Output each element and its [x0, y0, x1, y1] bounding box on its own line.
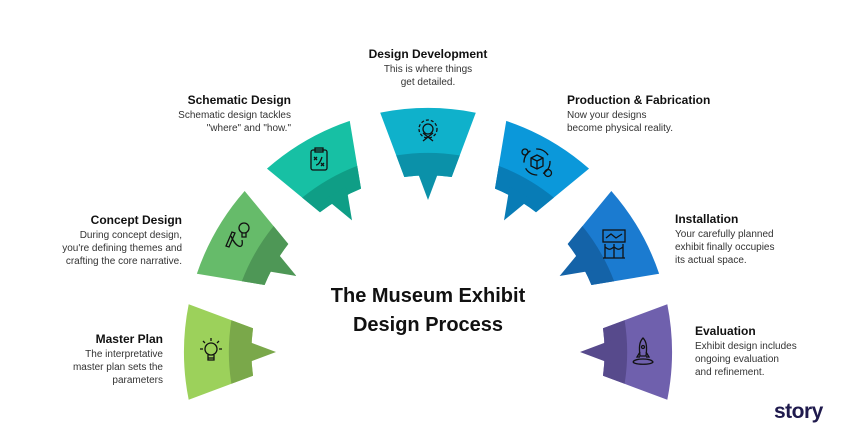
text: Concept Design: During concept design, [80, 230, 182, 241]
text: Evaluation [695, 324, 797, 378]
text: Schematic Design [178, 93, 291, 134]
segment: Concept Design [193, 189, 320, 317]
text: Schematic Design: Schematic design tackles [178, 110, 291, 121]
text: Design Development: get detailed. [401, 77, 455, 88]
text: Concept Design: Concept Design [91, 213, 182, 227]
text: Design Development: Design Development [369, 47, 487, 61]
title: Design Process [353, 314, 503, 336]
text: Production & Fabrication: Now your designs [567, 110, 646, 121]
title [330, 285, 526, 336]
icon: lightbulb [200, 338, 222, 360]
text: Installation: Installation [675, 212, 738, 226]
text: Installation: exhibit finally occupies [675, 242, 774, 253]
text: Design Development [369, 47, 488, 88]
text: Installation: its actual space. [675, 255, 747, 266]
text: Master Plan [73, 332, 163, 386]
text: Evaluation: and refinement. [695, 367, 764, 378]
segment: Design Development [380, 108, 476, 200]
text: Master Plan: The interpretative [85, 349, 163, 360]
segment: Production & Fabrication [463, 117, 591, 244]
segment: Installation [536, 189, 663, 317]
text: Master Plan: master plan sets the [73, 362, 163, 373]
text: Production & Fabrication: Production & Fabrication [567, 93, 710, 107]
text: Concept Design: you're defining themes and [62, 243, 182, 254]
icon: rocket [633, 338, 653, 364]
text: Evaluation: Exhibit design includes [695, 341, 797, 352]
text: Production & Fabrication [567, 93, 710, 134]
icon: clipboard plan [311, 148, 327, 170]
icon: gear and tools [419, 120, 437, 141]
text: Concept Design [62, 213, 182, 267]
text: Master Plan: Master Plan [96, 332, 163, 346]
segment: Evaluation [580, 304, 672, 400]
icon: pencil and bulb [226, 223, 249, 247]
icon: production cycle [522, 149, 552, 176]
segment: Master Plan [184, 304, 276, 400]
text: Schematic Design: Schematic Design [188, 93, 291, 107]
text: Installation [675, 212, 774, 266]
text: Design Development: This is where things [384, 64, 472, 75]
segment: Schematic Design [265, 117, 393, 244]
text: Evaluation: Evaluation [695, 324, 756, 338]
text: Master Plan: parameters [112, 375, 163, 386]
text: Installation: Your carefully planned [675, 229, 774, 240]
title: The Museum Exhibit [331, 285, 525, 307]
text: Concept Design: crafting the core narrative. [66, 256, 182, 267]
logo: story: story [774, 400, 823, 423]
text: Evaluation: ongoing evaluation [695, 354, 779, 365]
icon: exhibit stanchions [603, 230, 625, 258]
text: Schematic Design: "where" and "how." [207, 123, 291, 134]
text: Production & Fabrication: become physical reality. [567, 123, 673, 134]
